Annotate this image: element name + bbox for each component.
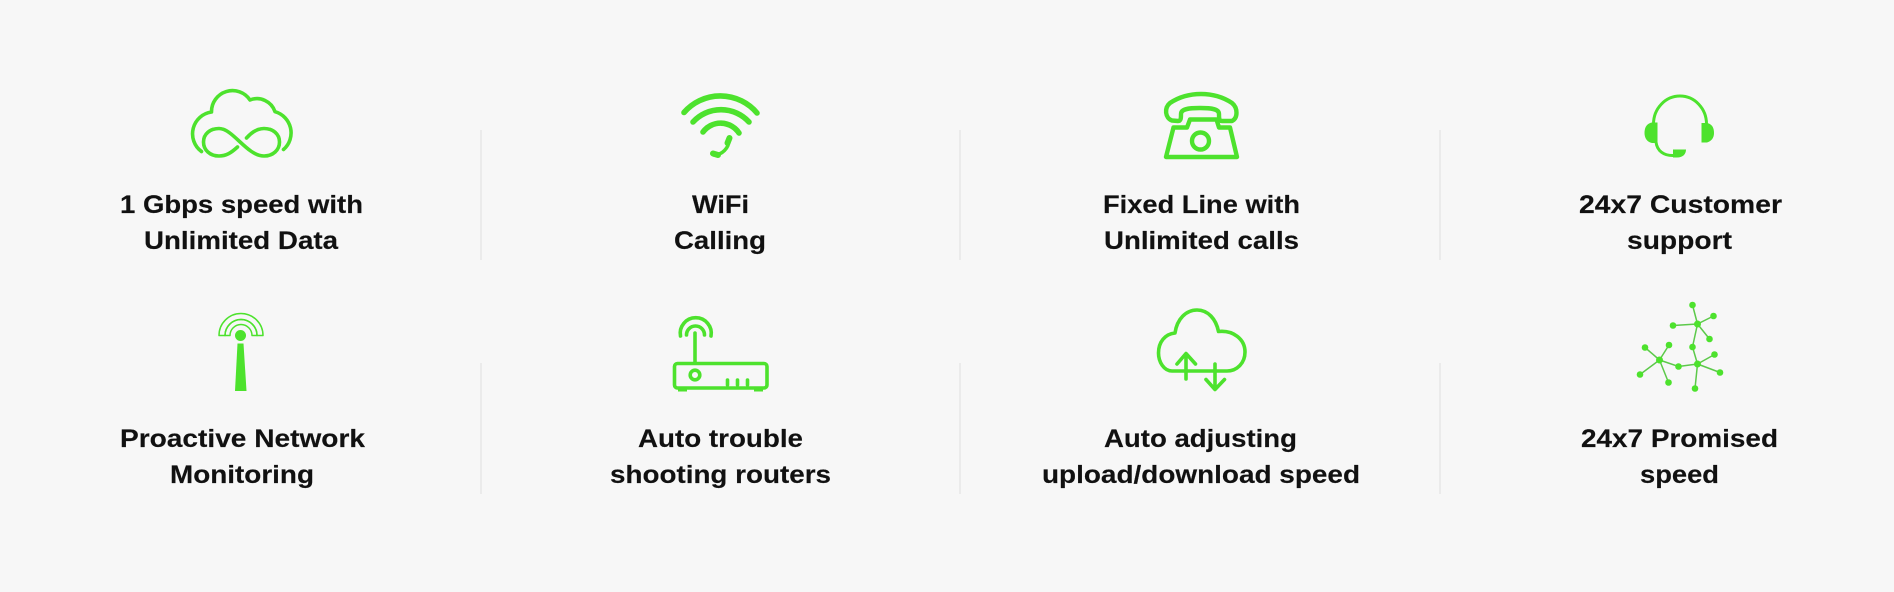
heading: 24x7 Promised speed [1581,425,1778,489]
panel: auto adjusting speed [1042,310,1360,489]
panel: promised speed [1581,302,1778,489]
heading: 24x7 Promised speed: 24x7 Promised [1581,425,1778,453]
panel: customer support [1579,96,1782,255]
panel: 1 Gbps speed [120,91,363,255]
icon: cloud with infinity [193,91,291,156]
heading: 24x7 Customer support: support [1627,227,1733,255]
panel: WiFi calling [674,96,766,255]
icon: network nodes [1637,302,1723,392]
heading: 1 Gbps speed with Unlimited Data: 1 Gbps speed with [120,191,363,219]
heading: Auto trouble shooting routers: shooting routers [610,461,831,489]
heading: 24x7 Promised speed: speed [1640,461,1719,489]
panel: auto trouble shooting [610,318,831,489]
heading: WiFi Calling [674,191,766,255]
heading: Proactive Network Monitoring: Proactive Network [120,425,365,453]
heading: 24x7 Customer support [1579,191,1782,255]
heading: 1 Gbps speed with Unlimited Data [120,191,363,255]
icon: router [674,318,767,392]
icon: headset [1644,96,1714,158]
heading: Auto adjusting upload/download speed [1042,425,1360,489]
heading: WiFi Calling: WiFi [692,191,749,219]
heading: WiFi Calling: Calling [674,227,766,255]
icon: telephone [1166,94,1237,157]
panel: network monitoring [120,314,365,489]
heading: Auto adjusting upload/download speed: upload/download speed [1042,461,1360,489]
icon: signal tower [219,314,263,391]
heading: Auto trouble shooting routers: Auto trouble [638,425,803,453]
heading: Proactive Network Monitoring [120,425,365,489]
heading: Fixed Line with Unlimited calls: Unlimited calls [1104,227,1299,255]
icon: cloud with up and down arrows [1158,310,1245,390]
heading: Fixed Line with Unlimited calls: Fixed Line with [1103,191,1300,219]
panel: fixed line [1103,94,1300,255]
heading: 24x7 Customer support: 24x7 Customer [1579,191,1782,219]
icon: wifi with phone [684,96,757,155]
heading: Auto adjusting upload/download speed: Auto adjusting [1104,425,1297,453]
heading: Fixed Line with Unlimited calls [1103,191,1300,255]
heading: Proactive Network Monitoring: Monitoring [170,461,314,489]
heading: 1 Gbps speed with Unlimited Data: Unlimited Data [144,227,339,255]
heading: Auto trouble shooting routers [610,425,831,489]
